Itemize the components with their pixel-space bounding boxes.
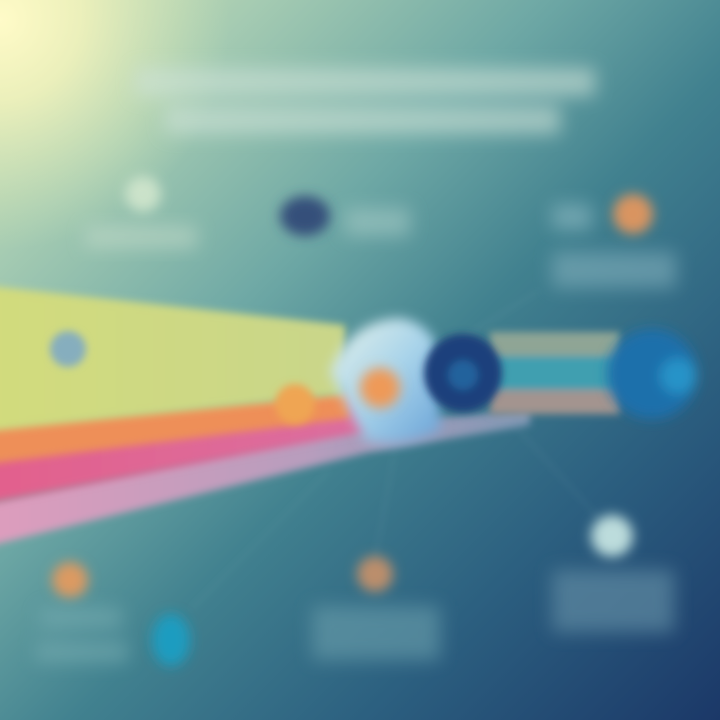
bright blue circle node bbox=[607, 329, 697, 419]
text block bbox=[312, 606, 440, 660]
icon: orange circle bbox=[52, 562, 88, 598]
top-left callout bbox=[85, 176, 197, 248]
bottom-right callout bbox=[552, 515, 674, 632]
text block bbox=[552, 252, 676, 288]
label bbox=[552, 204, 592, 230]
bottom-left callout bbox=[36, 562, 128, 662]
bottom-centre callout bbox=[312, 556, 440, 660]
faint connector lines bbox=[190, 290, 600, 610]
orange node in prism bbox=[360, 368, 400, 408]
light beam: yellow band bbox=[0, 285, 345, 432]
light beam: orange band bbox=[0, 390, 350, 465]
light beam: pink band bbox=[0, 385, 385, 505]
top-right callout bbox=[552, 194, 676, 288]
icon: orange circle bbox=[613, 194, 653, 234]
icon: pale circle bbox=[591, 515, 633, 557]
icon: orange circle bbox=[357, 556, 393, 592]
light beam: pale pink band bbox=[0, 410, 530, 548]
central prism glow bbox=[330, 318, 440, 443]
text block bbox=[552, 570, 674, 632]
blue icon on yellow band bbox=[50, 331, 86, 367]
text block bbox=[345, 208, 410, 236]
text block bbox=[85, 226, 197, 248]
icon: pale person bbox=[125, 176, 161, 212]
right spectrum bars bbox=[490, 332, 620, 414]
icon: dark circle bbox=[280, 196, 330, 236]
dark blue circle node bbox=[424, 334, 502, 412]
orange icon on beam bbox=[275, 384, 315, 424]
top-centre callout bbox=[280, 196, 410, 236]
title text block bbox=[135, 68, 595, 134]
text block bbox=[36, 608, 128, 662]
icon: cyan circle bbox=[152, 614, 190, 666]
